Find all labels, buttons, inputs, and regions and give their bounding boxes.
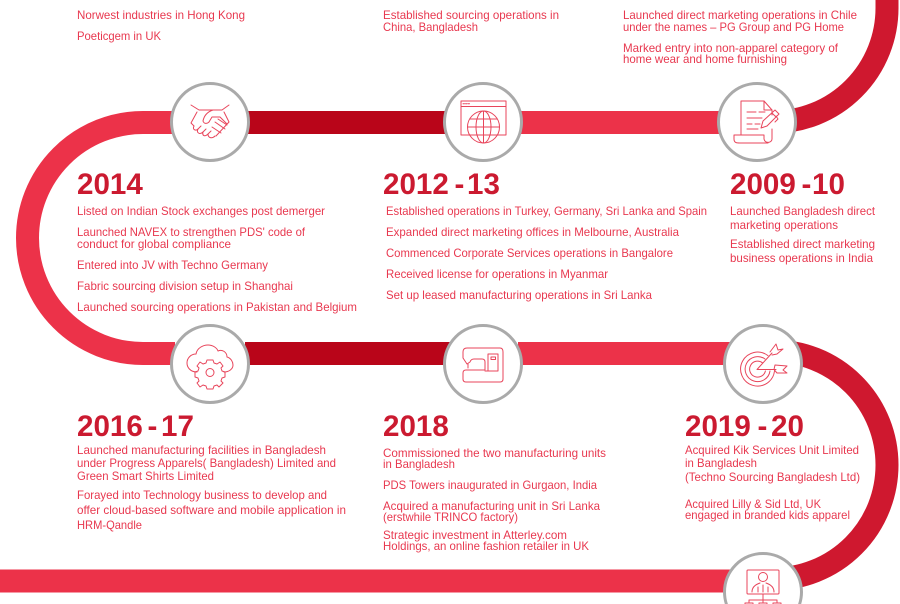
- year block: 2012-13: [383, 168, 707, 302]
- text: 2009-10 milestones: business operations in India: [730, 252, 874, 265]
- text: 2016-17 milestones: Green Smart Shirts Limited: [77, 470, 214, 483]
- text: 2014 milestones: [77, 205, 357, 314]
- top text: left column: Norwest industries in Hong Kong: [77, 9, 245, 22]
- text: 2014 milestones: Entered into JV with Techno Germany: [77, 259, 268, 272]
- text: 2012-13 milestones: [386, 205, 707, 302]
- text: 2019-20 milestones: engaged in branded kids apparel: [685, 509, 850, 522]
- heading: 2009-10: 2009: [730, 168, 796, 201]
- icon: video presenter with org chart: [745, 570, 781, 604]
- text: 2012-13 milestones: Received license for operations in Myanmar: [386, 268, 608, 281]
- bottom band: [0, 570, 730, 592]
- milestone node: cloud and gear: [172, 326, 248, 402]
- heading: 2019-20: 20: [771, 410, 804, 443]
- light segment row two: [518, 342, 730, 365]
- top text: right column: Launched direct marketing operations in Chile: [623, 9, 857, 22]
- lower right curve: [773, 351, 887, 579]
- icon: handshake: [191, 105, 229, 138]
- text: 2019-20 milestones: in Bangladesh: [685, 457, 757, 470]
- heading: 2012-13: 13: [467, 168, 500, 201]
- text: 2014 milestones: conduct for global compliance: [77, 238, 231, 251]
- text: 2018 milestones: Holdings, an online fashion retailer in UK: [383, 540, 589, 553]
- text: 2009-10 milestones: marketing operations: [730, 219, 838, 232]
- top text: right column: [623, 9, 857, 66]
- text: 2009-10 milestones: Established direct marketing: [730, 238, 875, 251]
- text: 2012-13 milestones: Established operations in Turkey, Germany, Sri Lanka and Spain: [386, 205, 707, 218]
- text: 2012-13 milestones: Expanded direct marketing offices in Melbourne, Australia: [386, 226, 680, 239]
- year block: 2019-20: [685, 410, 860, 522]
- text: 2014 milestones: Fabric sourcing division setup in Shanghai: [77, 280, 293, 293]
- top text: right column: under the names – PG Group and PG Home: [623, 21, 844, 34]
- text: 2018 milestones: Commissioned the two manufacturing units: [383, 447, 606, 460]
- icon: sewing machine: [463, 348, 503, 382]
- text: 2016-17 milestones: [77, 444, 346, 532]
- text: 2018 milestones: Strategic investment in Atterley.com: [383, 529, 567, 542]
- text: 2012-13 milestones: Set up leased manufacturing operations in Sri Lanka: [386, 289, 653, 302]
- heading: 2014: 2014: [77, 168, 143, 201]
- text: 2018 milestones: (erstwhile TRINCO factory): [383, 511, 518, 524]
- heading: 2019-20: -: [758, 410, 767, 443]
- year block: 2016-17: [77, 410, 346, 532]
- text: 2018 milestones: Acquired a manufacturing unit in Sri Lanka: [383, 500, 601, 513]
- heading: 2009-10: -: [802, 168, 811, 201]
- text: 2012-13 milestones: Commenced Corporate Services operations in Bangalore: [386, 247, 673, 260]
- milestone node: globe: [444, 84, 522, 160]
- heading: 2016-17: 17: [161, 410, 194, 443]
- text: 2016-17 milestones: offer cloud-based software and mobile application in: [77, 504, 346, 517]
- left curve: [28, 122, 175, 354]
- year block: 2014: [77, 168, 357, 314]
- icon: target with arrows: [741, 344, 787, 386]
- year block: 2009-10: [730, 168, 876, 265]
- text: 2018 milestones: [383, 447, 606, 553]
- text: 2019-20 milestones: [685, 444, 860, 522]
- text: 2009-10 milestones: Launched Bangladesh direct: [730, 205, 876, 218]
- text: 2019-20 milestones: (Techno Sourcing Bangladesh Ltd): [685, 471, 860, 484]
- text: 2019-20 milestones: Acquired Kik Services Unit Limited: [685, 444, 859, 457]
- top text: right column: Marked entry into non-apparel category of: [623, 42, 839, 55]
- year block: 2018: [383, 410, 606, 553]
- milestone node: target: [724, 326, 802, 402]
- top text: middle column: [383, 9, 559, 34]
- heading: 2009-10: 10: [812, 168, 845, 201]
- top text: right column: home wear and home furnishing: [623, 53, 787, 66]
- text: 2016-17 milestones: Forayed into Technology business to develop and: [77, 489, 327, 502]
- light segment row one: [518, 111, 725, 134]
- text: 2014 milestones: Listed on Indian Stock exchanges post demerger: [77, 205, 325, 218]
- top text: left column: Poeticgem in UK: [77, 30, 161, 43]
- heading: 2016-17: 2016: [77, 410, 143, 443]
- milestone node: document: [718, 84, 796, 160]
- top text: middle column: Established sourcing operations in: [383, 9, 559, 22]
- text: 2019-20 milestones: Acquired Lilly & Sid Ltd, UK: [685, 498, 821, 511]
- heading: 2012-13: 2012: [383, 168, 449, 201]
- top text: middle column: China, Bangladesh: [383, 21, 478, 34]
- text: 2009-10 milestones: [730, 205, 876, 265]
- milestone node: presenter: [724, 554, 802, 604]
- heading: 2012-13: -: [454, 168, 464, 201]
- icon: browser window with globe: [461, 101, 506, 143]
- dark segment row one: [245, 111, 450, 134]
- dark segment row two: [245, 342, 450, 365]
- text: 2016-17 milestones: HRM-Qandle: [77, 519, 142, 532]
- heading: 2019-20: 2019: [685, 410, 751, 443]
- icon: cloud with gear: [187, 345, 233, 389]
- text: 2018 milestones: in Bangladesh: [383, 458, 455, 471]
- text: 2016-17 milestones: under Progress Apparels( Bangladesh) Limited and: [77, 457, 336, 470]
- milestone node: handshake: [172, 84, 248, 160]
- heading: 2018: 2018: [383, 410, 449, 443]
- text: 2014 milestones: Launched NAVEX to strengthen PDS' code of: [77, 226, 306, 239]
- icon: scroll and pen: [734, 101, 779, 143]
- text: 2014 milestones: Launched sourcing operations in Pakistan and Belgium: [77, 301, 357, 314]
- top right curve: [773, 0, 887, 122]
- heading: 2016-17: -: [148, 410, 157, 443]
- text: 2018 milestones: PDS Towers inaugurated in Gurgaon, India: [383, 479, 598, 492]
- milestone node: sewing machine: [444, 326, 522, 402]
- text: 2016-17 milestones: Launched manufacturing facilities in Bangladesh: [77, 444, 326, 457]
- top text: left column: [77, 9, 245, 43]
